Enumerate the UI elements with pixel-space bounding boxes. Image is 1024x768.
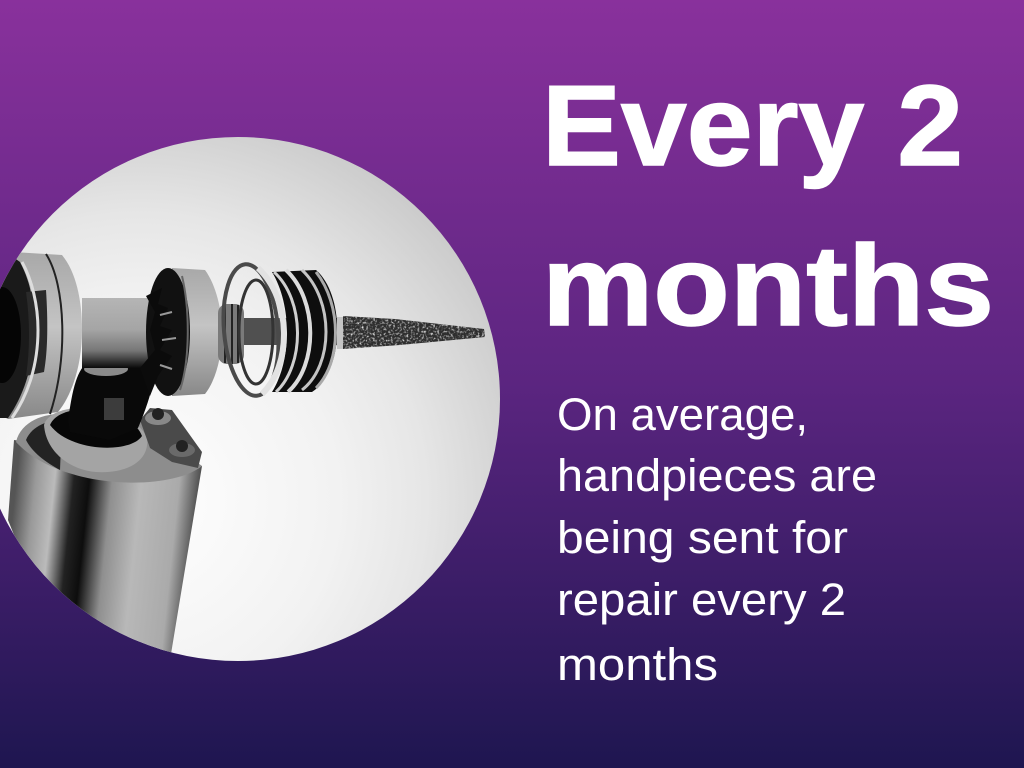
description text: repair every 2 [557, 574, 846, 625]
description text: handpieces are [557, 450, 877, 501]
description text: On average, [557, 389, 808, 440]
description text [557, 389, 877, 690]
small collar and shaft [218, 304, 339, 364]
title: Every 2 [542, 63, 963, 190]
title: months [542, 223, 994, 350]
description text: months [557, 639, 718, 690]
title [542, 63, 994, 350]
left large head [0, 252, 82, 419]
spring coils [218, 262, 337, 398]
neck [69, 368, 150, 428]
handpiece grip cylinder [8, 408, 202, 660]
diamond bur tip [337, 316, 485, 349]
bearing with teeth [140, 268, 222, 396]
description text: being sent for [557, 512, 848, 563]
photo: dental handpiece in circle [0, 130, 510, 670]
head shaft [82, 298, 149, 368]
